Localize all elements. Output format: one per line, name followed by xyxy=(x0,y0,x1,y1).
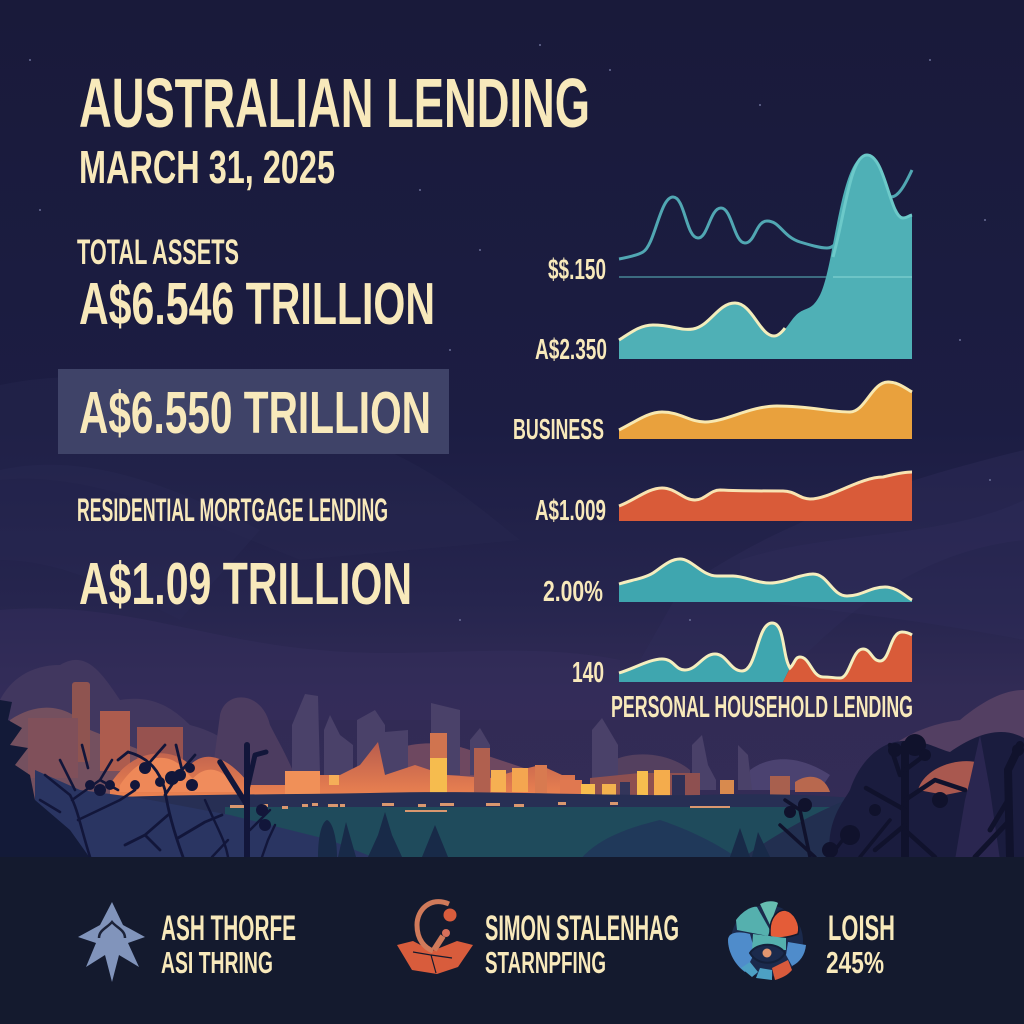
stat: total assets: A$6.546 TRILLION xyxy=(79,271,435,337)
credit: Ash Thorfe: ASH THORFE xyxy=(161,909,296,948)
shoreline lights xyxy=(230,802,730,812)
highlight box: A$6.550 TRILLION xyxy=(79,380,431,446)
right sunset glow xyxy=(918,761,985,795)
left conifer xyxy=(0,700,90,858)
skyline illustration xyxy=(0,660,1024,860)
footer band xyxy=(0,857,1024,1024)
icon: blue star xyxy=(78,902,145,982)
credit: Simon Stalenhag: STARNPFING xyxy=(485,945,606,980)
credit: Simon Stalenhag: SIMON STALENHAG xyxy=(485,909,679,948)
small conifers xyxy=(318,812,770,857)
stat: residential mortgage lending: A$1.09 TRILLION xyxy=(79,551,412,617)
chart 1 labels: $$.150 xyxy=(548,254,606,286)
distant towers xyxy=(292,694,752,790)
chart 3: red area: A$1.009 xyxy=(535,495,606,527)
credit: Ash Thorfe: ASI THRING xyxy=(161,945,273,980)
near shore foliage xyxy=(35,770,860,860)
title: AUSTRALIAN LENDING xyxy=(79,64,590,142)
tree foliage xyxy=(85,762,271,831)
credit: Loish xyxy=(826,909,895,980)
right tree mass xyxy=(829,732,1024,860)
chart 4: teal area xyxy=(543,559,912,608)
stat: total assets: TOTAL ASSETS xyxy=(77,233,239,272)
credit: Loish: 245% xyxy=(826,945,884,980)
chart 3: red area xyxy=(535,472,912,527)
stat: residential mortgage lending: RESIDENTIAL MORTGAGE LENDING xyxy=(77,492,388,528)
left bare trees xyxy=(40,745,275,857)
chart 1 labels: A$2.350 xyxy=(535,334,607,366)
icon: red bowl with arc xyxy=(397,902,473,974)
icon: stained-glass circle with eye xyxy=(728,901,806,980)
credit: Ash Thorfe xyxy=(161,909,296,980)
clouds behind the city xyxy=(0,660,1024,860)
chart 1 labels xyxy=(535,254,607,366)
mauve mid-rise buildings xyxy=(28,682,183,778)
right dark trees xyxy=(780,745,1020,857)
chart 2: business xyxy=(513,382,912,446)
right conifer xyxy=(955,735,1000,860)
chart 1: teal area with line xyxy=(619,155,912,359)
credit: Loish: LOISH xyxy=(828,909,895,948)
highlight box xyxy=(58,369,449,454)
sunset glow band xyxy=(110,733,575,800)
credit: Simon Stalenhag xyxy=(485,909,679,980)
right foliage xyxy=(784,734,1024,858)
chart 4: teal area: 2.00% xyxy=(543,576,603,608)
chart 5: teal and red area: 140 xyxy=(572,657,604,689)
stat: residential mortgage lending xyxy=(77,492,412,617)
water xyxy=(225,807,860,860)
date subtitle: MARCH 31, 2025 xyxy=(79,141,335,193)
chart 5: teal and red area xyxy=(572,623,912,689)
dark shoreline xyxy=(60,792,880,816)
right side lit buildings xyxy=(560,770,830,800)
chart 2: business: BUSINESS xyxy=(513,414,604,446)
stat: total assets xyxy=(77,233,435,337)
